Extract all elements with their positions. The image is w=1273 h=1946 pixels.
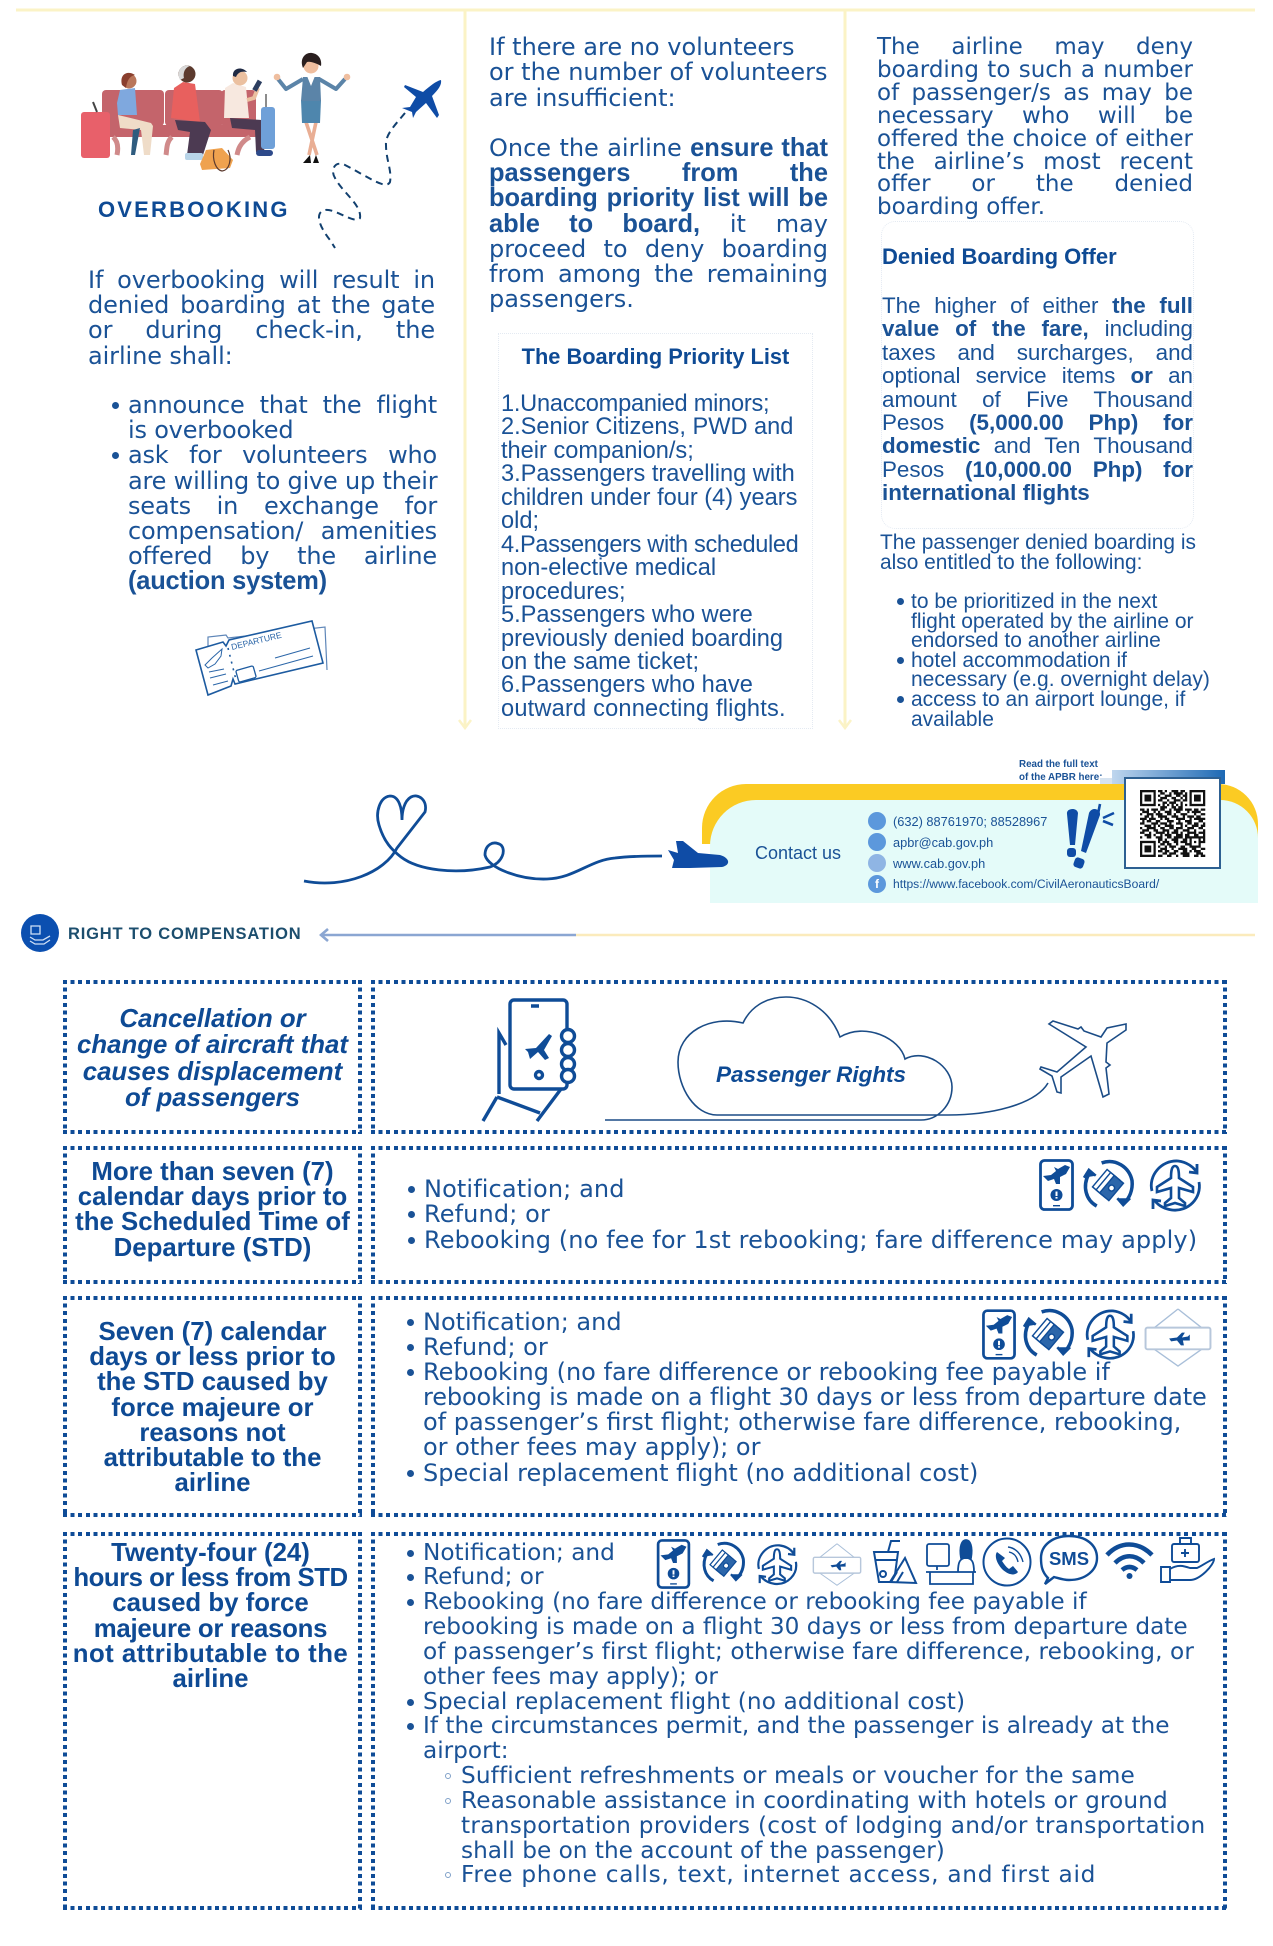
heading text: RIGHT TO COMPENSATION [68, 925, 301, 943]
numbered priority list: 3.Passengers travelling with [501, 461, 795, 487]
numbered priority list: 1.Unaccompanied minors; [501, 391, 769, 417]
numbered priority list [501, 391, 798, 722]
remedies list: Notification; and [423, 1538, 615, 1566]
text: offer amounts: amount of Five Thousand [882, 387, 1193, 412]
row 4 left: twenty-four hours or less: airline [172, 1665, 248, 1693]
QR code card [1100, 770, 1225, 869]
remedies list: Reasonable assistance in coordinating with hotels or ground [461, 1787, 1168, 1814]
text: overbooking intro: airline shall: [88, 342, 233, 370]
text: also entitled [880, 531, 1196, 574]
icon: cloud with flight trail [605, 996, 1127, 1121]
row 3 left: seven days or less: force majeure or [111, 1394, 314, 1422]
row 4 left: twenty-four hours or less: Twenty-four (24) [111, 1539, 310, 1567]
text: airline may deny boarding: necessary who will be [877, 103, 1193, 129]
text: deny boarding procedure: able to board, it may [489, 210, 828, 238]
contact panel [702, 784, 1258, 903]
list: airline duties [112, 391, 438, 595]
icon: hand holding phone [482, 998, 576, 1122]
text: deny boarding procedure: proceed to deny boarding [489, 235, 828, 263]
text: no volunteers [489, 33, 828, 112]
remedies list: rebooking is made on a flight 30 days or less from departure date [423, 1383, 1207, 1411]
text: overbooking intro: If overbooking will result in [88, 266, 435, 294]
list: airline duties: is overbooked [128, 416, 293, 444]
remedies list: Rebooking (no fare difference or rebooking fee payable if [423, 1588, 1087, 1615]
numbered priority list: on the same ticket; [501, 649, 699, 675]
heading: overbooking: OVERBOOKING [98, 197, 290, 222]
row 1 left: cancellation heading: Cancellation or [119, 1005, 306, 1033]
row 1 left: cancellation heading: of passengers [125, 1084, 300, 1112]
row 2 left: more than seven days [63, 1146, 362, 1284]
icon: airplane with dashed route [318, 80, 442, 248]
icon: solid airplane at end of trail [668, 841, 728, 868]
text: offer amounts: optional service items or an [882, 363, 1193, 388]
text: airline may deny boarding: of passenger/s as may be [877, 80, 1193, 106]
remedies list: other fees may apply); or [423, 1663, 718, 1690]
numbered priority list: their companion/s; [501, 438, 694, 464]
row 3 right: remedies [371, 1296, 1227, 1517]
list: denied boarding entitlements: available [911, 708, 994, 731]
list: denied boarding entitlements: necessary (e.g. overnight delay) [911, 668, 1210, 691]
remedies list: or other fees may apply); or [423, 1433, 760, 1461]
remedies list: of passenger’s first flight; otherwise fare difference, rebooking, or [423, 1638, 1194, 1665]
caption: read full text: Read the full text [1019, 759, 1098, 770]
list: denied boarding entitlements: to be prioritized in the next [911, 590, 1157, 613]
list: denied boarding entitlements: hotel accommodation if [911, 649, 1127, 672]
icon: cloud with flight trail: Passenger Rights [716, 1062, 906, 1087]
contact details list: f [875, 877, 879, 891]
icons: full assistance row: SMS [1049, 1548, 1089, 1569]
text: deny boarding procedure: passengers from the [489, 159, 828, 187]
text: offer amounts: Pesos (5,000.00 Php) for [882, 410, 1193, 435]
row 1 right: passenger rights banner [371, 980, 1227, 1134]
list: airline duties: seats in exchange for [128, 492, 437, 520]
row 2 left: more than seven days: Departure (STD) [114, 1234, 311, 1262]
text: also entitled: The passenger denied boarding is [880, 531, 1196, 554]
label: contact us: Contact us [755, 843, 841, 863]
mint panel [710, 800, 1258, 903]
list: airline duties: (auction system) [128, 567, 327, 595]
top yellow guide line [16, 8, 1255, 730]
remedies list: of passenger’s first flight; otherwise fare difference, rebooking, [423, 1408, 1181, 1436]
remedies list: Rebooking (no fee for 1st rebooking; fare difference may apply) [424, 1226, 1197, 1254]
remedies list: airport: [423, 1737, 509, 1764]
decorative plane trail: heart loop [304, 794, 662, 884]
text: no volunteers: If there are no volunteers [489, 33, 795, 61]
text: offer amounts: Pesos (10,000.00 Php) for [882, 457, 1193, 482]
caption: read full text [1019, 759, 1102, 783]
row 1 left: cancellation heading: causes displacement [83, 1058, 342, 1086]
icons: notification, refund, rebooking [1039, 1159, 1201, 1212]
text: deny boarding procedure: Once the airline ensure that [489, 134, 828, 162]
text: overbooking intro: denied boarding at the gate [88, 291, 435, 319]
list: airline duties: ask for volunteers who [128, 441, 437, 469]
remedies list: rebooking is made on a flight 30 days or less from departure date [423, 1613, 1188, 1640]
numbered priority list: 6.Passengers who have [501, 672, 753, 698]
list: denied boarding entitlements: access to an airport lounge, if [911, 688, 1185, 711]
icon: departure ticket [195, 620, 328, 696]
text: airline may deny boarding: offered the choice of either [877, 126, 1193, 152]
text: also entitled: also entitled to the following: [880, 551, 1142, 574]
list: airline duties: offered by the airline [128, 542, 437, 570]
remedies list: Free phone calls, text, internet access, and first aid [461, 1861, 1096, 1888]
panel: boarding priority list [498, 333, 813, 729]
row 4 left: twenty-four hours or less: hours or less from STD [73, 1564, 348, 1592]
remedies list: Refund; or [424, 1200, 550, 1228]
text: no volunteers: or the number of volunteers [489, 58, 828, 86]
text: airline may deny boarding: the airline’s most recent [877, 149, 1193, 175]
text: airline may deny boarding [876, 34, 1193, 220]
remedies list [408, 1175, 1197, 1254]
remedies list: If the circumstances permit, and the passenger is already at the [423, 1712, 1170, 1739]
remedies list: Notification; and [424, 1175, 625, 1203]
icons: notification, refund, rebooking, special flight [982, 1308, 1212, 1367]
list: denied boarding entitlements: endorsed to another airline [911, 629, 1161, 652]
remedies list [407, 1538, 1206, 1888]
numbered priority list: previously denied boarding [501, 626, 783, 652]
text: airline may deny boarding: boarding offer. [877, 194, 1045, 220]
row 3 left: seven days or less [63, 1296, 362, 1517]
numbered priority list: 4.Passengers with scheduled [501, 532, 798, 558]
text: airline may deny boarding: boarding to such a number [877, 57, 1193, 83]
text: deny boarding procedure: passengers. [489, 285, 634, 313]
text: offer amounts: taxes and surcharges, and [882, 340, 1193, 365]
text: deny boarding procedure: boarding priority list will be [489, 184, 828, 212]
row 4 left: twenty-four hours or less: caused by force [112, 1589, 309, 1617]
row 4 left: twenty-four hours or less: not attributable to the [73, 1640, 348, 1668]
yellow banner shape [702, 784, 1258, 844]
contact details list: www.cab.gov.ph [893, 856, 985, 871]
icon: exclamation marks [1066, 804, 1114, 869]
text: offer amounts: value of the fare, including [882, 316, 1193, 341]
numbered priority list: 5.Passengers who were [501, 602, 753, 628]
numbered priority list: non-elective medical [501, 555, 716, 581]
panel: denied boarding offer [881, 221, 1194, 529]
row 1 left: cancellation heading: change of aircraft that [77, 1031, 348, 1059]
row 2 left: more than seven days: More than seven (7) [91, 1158, 334, 1186]
remedies list: Sufficient refreshments or meals or voucher for the same [461, 1762, 1135, 1789]
list: denied boarding entitlements: flight operated by the airline or [911, 610, 1194, 633]
illustration: passengers on bench with flight attendant [81, 52, 350, 172]
remedies list: Special replacement flight (no additional cost) [423, 1688, 965, 1715]
remedies list: Notification; and [423, 1308, 622, 1336]
text: overbooking intro [88, 266, 435, 370]
heading: denied boarding offer: Denied Boarding Offer [882, 244, 1117, 269]
remedies list: Refund; or [423, 1333, 548, 1361]
row 3 left: seven days or less: airline [174, 1469, 250, 1497]
text: offer amounts [882, 293, 1193, 505]
remedies list: Refund; or [423, 1563, 544, 1590]
section header: right to compensation [21, 914, 301, 952]
text: no volunteers: are insufficient: [489, 84, 676, 112]
remedies list: Rebooking (no fare difference or rebooking fee payable if [423, 1358, 1110, 1386]
arrow: section rule [319, 928, 1255, 942]
list: airline duties: compensation/ amenities [128, 517, 437, 545]
text: deny boarding procedure: from among the remaining [489, 260, 828, 288]
row 3 left: seven days or less: days or less prior to [89, 1343, 336, 1371]
numbered priority list: 2.Senior Citizens, PWD and [501, 414, 793, 440]
numbered priority list: old; [501, 508, 539, 534]
row 4 right: remedies and assistance [371, 1532, 1227, 1910]
row 3 left: seven days or less: Seven (7) calendar [98, 1318, 326, 1346]
text: overbooking intro: or during check-in, the [88, 316, 435, 344]
contact details list: (632) 88761970; 88528967 [893, 814, 1047, 829]
text: deny boarding procedure [489, 134, 828, 313]
icon: compensation badge [21, 914, 59, 952]
list: airline duties: announce that the flight [128, 391, 437, 419]
row 3 left: seven days or less: attributable to the [104, 1444, 321, 1472]
contact details list: apbr@cab.gov.ph [893, 835, 993, 850]
row 2 right: remedies [371, 1146, 1227, 1284]
contact details list [868, 812, 1160, 893]
row 4 left: twenty-four hours or less [63, 1532, 362, 1910]
row 1 left: cancellation heading [63, 980, 362, 1134]
list: airline duties: are willing to give up their [128, 467, 437, 495]
text: offer amounts: domestic and Ten Thousand [882, 433, 1193, 458]
row 4 left: twenty-four hours or less: majeure or reasons [94, 1615, 327, 1643]
contact details list: https://www.facebook.com/CivilAeronauticsBoard/ [893, 877, 1159, 891]
text: offer amounts: international flights [882, 480, 1090, 505]
row 3 left: seven days or less: the STD caused by [97, 1368, 328, 1396]
row 2 left: more than seven days: calendar days prior to [78, 1183, 347, 1211]
text: airline may deny boarding: The airline may deny [877, 34, 1193, 60]
heading: boarding priority list: The Boarding Priority List [522, 344, 789, 369]
text: airline may deny boarding: offer or the denied [877, 171, 1193, 197]
icon: departure ticket: DEPARTURE [230, 630, 283, 652]
numbered priority list: children under four (4) years [501, 485, 797, 511]
remedies list: transportation providers (cost of lodging and/or transportation [461, 1812, 1206, 1839]
list: denied boarding entitlements [897, 590, 1210, 731]
text: offer amounts: The higher of either the full [882, 293, 1193, 318]
row 2 left: more than seven days: the Scheduled Time of [75, 1208, 350, 1236]
icons: full assistance row [656, 1534, 1215, 1589]
numbered priority list: procedures; [501, 579, 626, 605]
remedies list [407, 1308, 1207, 1487]
row 3 left: seven days or less: reasons not [139, 1419, 286, 1447]
remedies list: shall be on the account of the passenger) [461, 1837, 945, 1864]
numbered priority list: outward connecting flights. [501, 696, 786, 722]
remedies list: Special replacement flight (no additional cost) [423, 1459, 978, 1487]
caption: read full text: of the APBR here: [1019, 772, 1102, 783]
